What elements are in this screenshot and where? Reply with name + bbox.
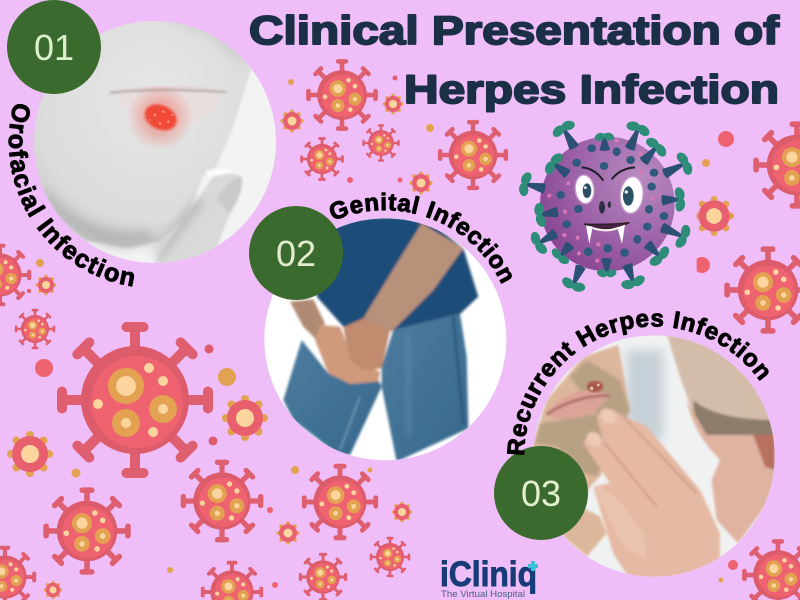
mascot spots [547,139,668,263]
badge 03: 03 [521,473,561,514]
title: Herpes Infection [404,68,779,112]
face [530,345,630,557]
cartoon virus mascot [516,116,697,300]
mirror hand [687,400,777,543]
jeans [382,314,468,462]
mascot spikes [516,116,697,296]
badge 01 [7,0,101,94]
finger [153,173,242,267]
photo: recurrent herpes infection [530,333,780,583]
label: recurrent herpes infection: Recurrent Herpes Infection [506,311,769,455]
badge 02: 02 [276,233,316,274]
face [30,17,252,248]
photo: orofacial infection [30,17,280,267]
title: Clinical Presentation of [249,9,780,53]
lips [545,390,610,418]
badge 02 [249,206,343,300]
mirror face [666,336,770,421]
forearm [363,223,463,332]
lesion [587,381,603,392]
mascot body [540,137,675,271]
lips [113,91,223,128]
badge 03 [494,446,588,540]
badge 01: 01 [34,27,74,68]
logo: iCliniq: The Virtual Hospital [441,589,525,600]
hand [583,409,720,580]
lesion [129,87,190,148]
hands [315,325,380,384]
title [249,9,780,112]
label: genital infection: Genital Infection [330,192,512,284]
label: orofacial infection: Orofacial Infection [8,104,134,287]
shirt [317,217,478,330]
logo: iCliniq: iCliniq [440,555,537,594]
mascot face [574,167,645,244]
photo: genital infection [260,213,513,467]
